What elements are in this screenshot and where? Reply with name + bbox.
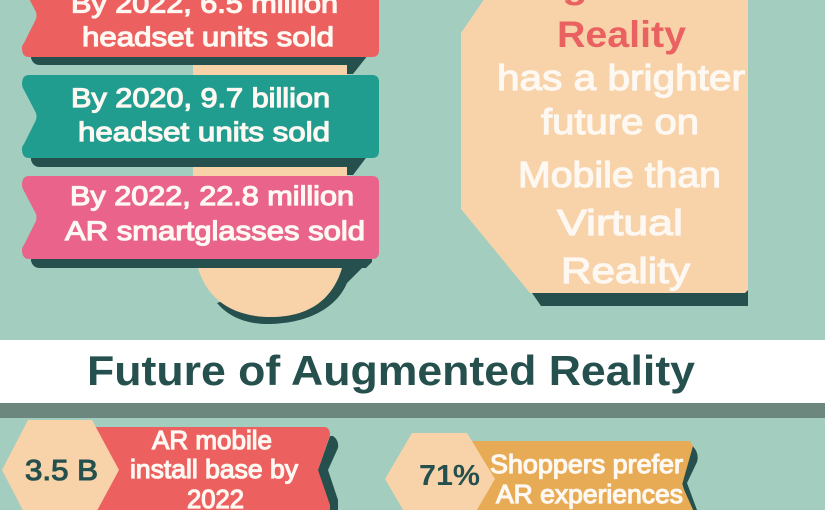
title band (0, 340, 825, 418)
banner: 9.7 billion headsets: By 2020, 9.7 billion (71, 83, 330, 113)
panel shadow (530, 290, 748, 306)
banner shadow (682, 445, 698, 510)
stat: 3.5 B AR mobile install base: install base by (130, 454, 298, 484)
statement text: Reality (561, 250, 690, 291)
stat: 3.5 B AR mobile install base: 3.5 B (25, 455, 98, 487)
banner: 9.7 billion headsets: headset units sold (78, 117, 330, 147)
red banner (96, 427, 330, 510)
stat: 71% shoppers prefer AR: 71% (419, 460, 480, 492)
statement text: Reality (557, 14, 686, 55)
stat: 3.5 B AR mobile install base (2, 420, 338, 510)
banner: 6.5 million headsets: headset units sold (82, 22, 334, 52)
title: Future of Augmented Reality (87, 347, 696, 394)
banner: 6.5 million headsets (22, 0, 379, 74)
peach column (193, 60, 347, 317)
banner: 22.8 million smartglasses: AR smartglasses sold (65, 216, 365, 246)
orange banner (470, 441, 694, 510)
stat: 3.5 B AR mobile install base: AR mobile (152, 425, 272, 455)
statement text (497, 0, 745, 291)
stat: 71% shoppers prefer AR: AR experiences (496, 479, 683, 509)
peach hexagon (2, 420, 119, 510)
statement text: has a brighter (497, 57, 745, 98)
statement text: Virtual (557, 202, 683, 243)
banner: 22.8 million smartglasses (22, 176, 379, 268)
peach column shadow (217, 258, 372, 324)
banner: 9.7 billion headsets (22, 75, 379, 175)
banner shadow (318, 436, 338, 510)
statement text: Mobile than (518, 154, 721, 195)
peach hexagon (385, 433, 495, 510)
statement text: future on (541, 101, 699, 142)
peach panel (461, 0, 748, 293)
banner: 22.8 million smartglasses: By 2022, 22.8 million (70, 181, 354, 211)
panel: AR on mobile statement (461, 0, 748, 306)
stat: 71% shoppers prefer AR: Shoppers prefer (490, 449, 683, 479)
panel: forecast banners with peach column (22, 0, 379, 324)
stat: 71% shoppers prefer AR (385, 433, 698, 510)
